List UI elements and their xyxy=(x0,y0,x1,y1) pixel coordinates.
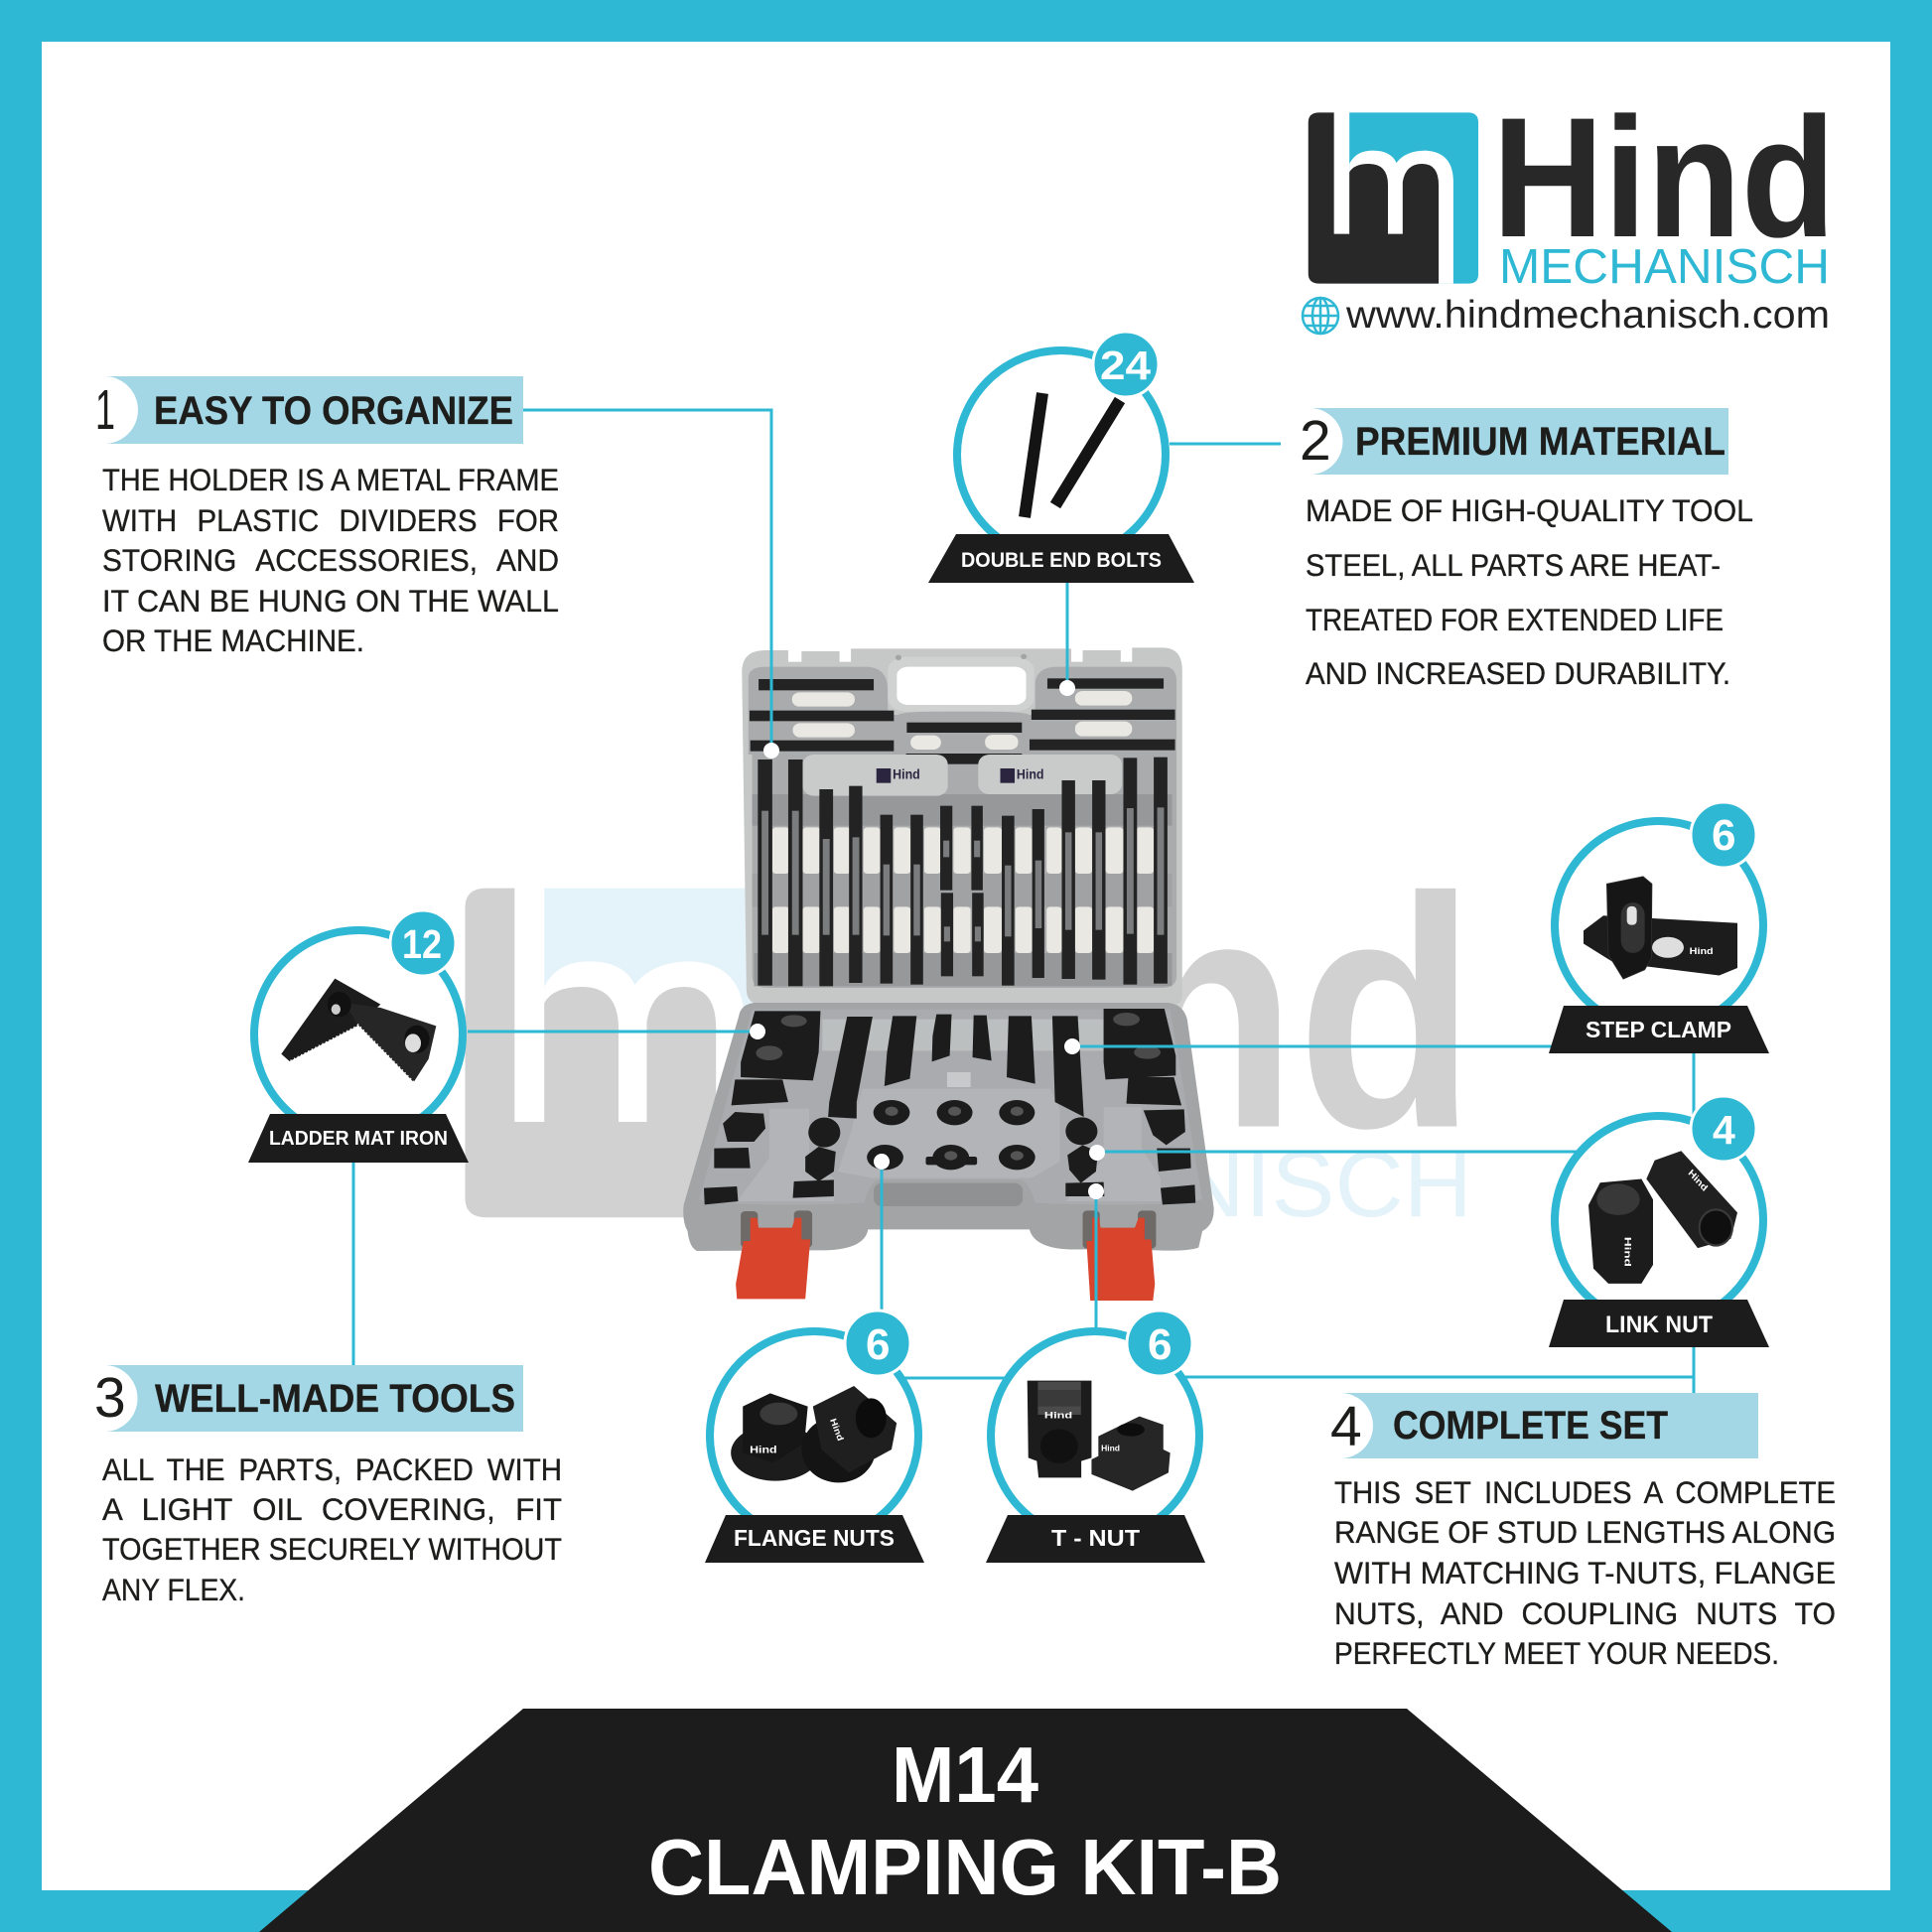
plate brand left xyxy=(877,767,920,783)
brand logo xyxy=(1303,82,1836,337)
step blocks and clamps xyxy=(704,1009,1195,1204)
panel: premium material xyxy=(1300,408,1753,691)
icon: flange nuts: Hind xyxy=(828,1417,846,1443)
plate brand right xyxy=(1000,767,1044,783)
count badge: 6 xyxy=(866,1320,890,1369)
body text xyxy=(1334,1474,1836,1671)
horizontal studs xyxy=(750,678,1175,764)
foam pills xyxy=(792,691,1132,750)
icon: step clamps: Hind xyxy=(1690,946,1714,956)
callout: t-nut xyxy=(986,1311,1205,1563)
body text: WITH PLASTIC DIVIDERS FOR xyxy=(102,502,559,538)
panel: complete set xyxy=(1330,1393,1836,1671)
name label xyxy=(1549,1006,1769,1053)
count badge xyxy=(845,1311,910,1376)
body text: ANY FLEX. xyxy=(102,1572,245,1607)
left column xyxy=(737,1109,834,1201)
callout: double end bolts xyxy=(928,332,1194,583)
heading: PREMIUM MATERIAL xyxy=(1355,420,1725,464)
number: 4 xyxy=(1330,1395,1362,1458)
icon: flange nuts xyxy=(731,1386,897,1482)
body text: AND INCREASED DURABILITY. xyxy=(1306,655,1730,691)
callout: link nut xyxy=(1549,1096,1769,1347)
icon: t-nuts: Hind xyxy=(1044,1410,1072,1421)
centre plate xyxy=(838,1089,1060,1178)
body text: IT CAN BE HUNG ON THE WALL xyxy=(102,583,559,619)
heading: EASY TO ORGANIZE xyxy=(154,389,513,433)
name label: STEP CLAMP xyxy=(1586,1017,1731,1042)
heading band xyxy=(1310,408,1728,475)
heading band xyxy=(1340,1393,1758,1458)
flange nuts xyxy=(867,1100,1035,1170)
case base with parts xyxy=(683,1003,1214,1301)
name label xyxy=(986,1515,1205,1563)
heading band xyxy=(104,1365,523,1432)
name label xyxy=(248,1114,469,1163)
name label: LADDER MAT IRON xyxy=(269,1128,448,1150)
case lid with studs xyxy=(742,647,1182,1006)
title line two: CLAMPING KIT-B xyxy=(648,1823,1282,1911)
body text: THIS SET INCLUDES A COMPLETE xyxy=(1334,1474,1836,1510)
body text: STEEL, ALL PARTS ARE HEAT- xyxy=(1306,547,1721,583)
body text: TREATED FOR EXTENDED LIFE xyxy=(1306,602,1724,637)
heading band xyxy=(104,376,523,444)
name label: DOUBLE END BOLTS xyxy=(961,549,1162,572)
name label xyxy=(705,1515,924,1563)
foam blocks xyxy=(772,827,1154,953)
body text: THE HOLDER IS A METAL FRAME xyxy=(102,462,559,497)
icon: flange nuts: Hind xyxy=(750,1445,777,1455)
count badge xyxy=(1127,1311,1192,1376)
icon: link nuts xyxy=(1588,1151,1737,1284)
title line one: M14 xyxy=(892,1730,1038,1819)
count badge: 4 xyxy=(1713,1107,1735,1153)
body text: RANGE OF STUD LENGTHS ALONG xyxy=(1334,1514,1836,1550)
red latches xyxy=(736,1218,1155,1301)
logo subtitle: MECHANISCH xyxy=(1499,240,1830,294)
vertical studs xyxy=(758,758,1168,986)
icon: link nuts: Hind xyxy=(1622,1237,1632,1267)
icon: step clamps xyxy=(1584,877,1737,979)
heading: COMPLETE SET xyxy=(1393,1404,1668,1448)
title banner xyxy=(259,1709,1672,1932)
count badge xyxy=(1093,332,1159,397)
watermark logo xyxy=(466,830,1476,1236)
count badge xyxy=(390,910,456,976)
count badge: 12 xyxy=(402,921,442,967)
icon: ladder blocks xyxy=(281,979,436,1082)
panel: well-made tools xyxy=(94,1365,562,1607)
icon: t-nuts: Hind xyxy=(1101,1445,1120,1453)
name label: T - NUT xyxy=(1051,1525,1140,1551)
callout: flange nuts xyxy=(705,1311,924,1563)
connector dots xyxy=(750,680,1105,1199)
plate brand right: Hind xyxy=(1017,767,1044,782)
icon: link nuts: Hind xyxy=(1687,1168,1710,1193)
body text: STORING ACCESSORIES, AND xyxy=(102,542,559,578)
callout: step clamp xyxy=(1549,802,1769,1053)
watermark logo: Hind xyxy=(825,830,1476,1197)
watermark logo: MECHANISCH xyxy=(832,1132,1472,1236)
body text xyxy=(102,462,559,658)
body text: MADE OF HIGH-QUALITY TOOL xyxy=(1306,492,1753,528)
open tool case xyxy=(683,647,1214,1301)
website: www.hindmechanisch.com xyxy=(1345,294,1830,337)
body text: PERFECTLY MEET YOUR NEEDS. xyxy=(1334,1635,1779,1671)
count badge xyxy=(1691,802,1756,868)
heading: WELL-MADE TOOLS xyxy=(155,1377,515,1421)
number: 1 xyxy=(95,378,115,442)
stud shanks xyxy=(761,807,1164,941)
count badge: 6 xyxy=(1148,1320,1172,1369)
number: 3 xyxy=(94,1366,126,1430)
body text: OR THE MACHINE. xyxy=(102,622,364,658)
count badge: 6 xyxy=(1712,811,1735,860)
logo mark xyxy=(1309,112,1478,284)
name label: FLANGE NUTS xyxy=(734,1525,895,1551)
body text: ALL THE PARTS, PACKED WITH xyxy=(102,1451,562,1487)
count badge xyxy=(1691,1096,1756,1162)
icon: globe xyxy=(1303,298,1338,334)
body text xyxy=(1306,492,1753,691)
logo wordmark: Hind xyxy=(1492,82,1836,273)
icon: t-nuts xyxy=(1028,1381,1171,1491)
body text xyxy=(102,1451,562,1607)
body text: NUTS, AND COUPLING NUTS TO xyxy=(1334,1595,1836,1631)
plate brand left: Hind xyxy=(893,767,920,782)
connector lines xyxy=(353,410,1694,1393)
panel: easy to organize xyxy=(95,376,559,658)
callout: ladder mat iron xyxy=(248,910,469,1163)
name label: LINK NUT xyxy=(1605,1311,1713,1338)
number: 2 xyxy=(1300,409,1331,473)
brand plates xyxy=(802,755,1122,796)
icon: bolts xyxy=(1025,393,1120,517)
body text: WITH MATCHING T-NUTS, FLANGE xyxy=(1334,1555,1836,1590)
body text: TOGETHER SECURELY WITHOUT xyxy=(102,1531,562,1567)
name label xyxy=(1549,1300,1769,1347)
body text: A LIGHT OIL COVERING, FIT xyxy=(102,1491,562,1527)
name label xyxy=(928,534,1194,583)
case hinges xyxy=(741,1210,1156,1249)
right column xyxy=(1065,1107,1161,1201)
count badge: 24 xyxy=(1100,343,1151,388)
